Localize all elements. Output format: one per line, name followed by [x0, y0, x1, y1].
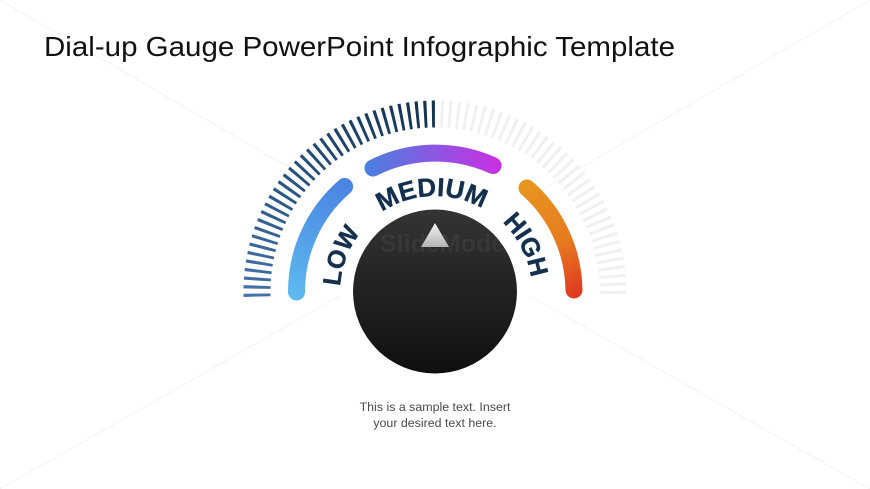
arc: medium [373, 153, 493, 168]
gauge ticks: inactive [440, 114, 613, 295]
arc: high [527, 188, 574, 290]
caption: This is a sample text. Insert [360, 400, 511, 414]
arc: low [296, 186, 345, 292]
caption: your desired text here. [373, 416, 497, 430]
title: Dial-up Gauge PowerPoint Infographic Template [44, 31, 675, 62]
label: low: LOW [322, 223, 358, 285]
gauge ticks: active [257, 114, 435, 297]
label: medium: MEDIUM [374, 178, 488, 211]
dial knob [353, 210, 517, 374]
label: high: HIGH [503, 211, 548, 276]
dial pointer [421, 223, 449, 247]
caption [360, 400, 511, 430]
watermark text: SlideModel [380, 230, 512, 258]
